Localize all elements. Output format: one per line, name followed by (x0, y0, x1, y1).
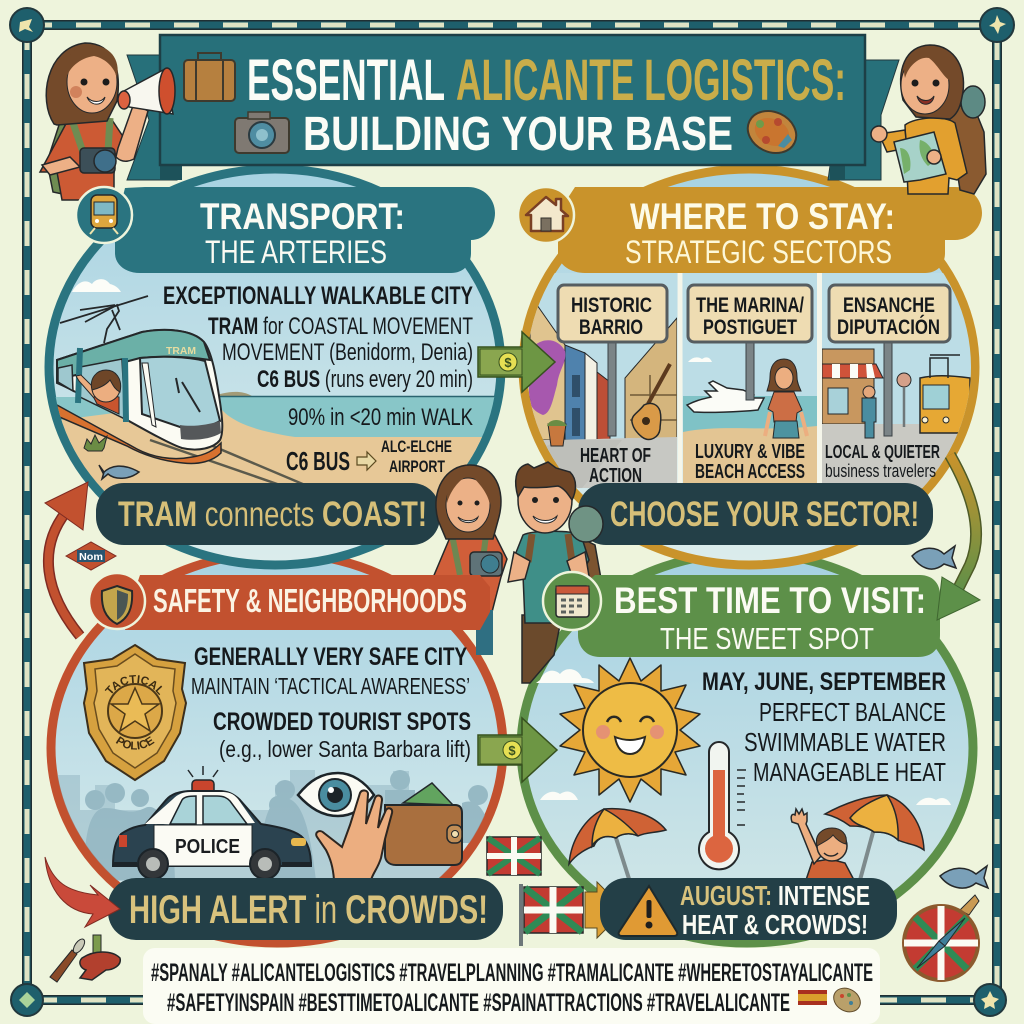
badge: POLICE (116, 736, 154, 750)
signs: ENSANCHE (843, 294, 935, 317)
icon: traveller (862, 398, 876, 438)
icon: train (76, 187, 132, 243)
best time text block: PERFECT BALANCE (759, 697, 946, 727)
airport route label: C6 BUS (286, 446, 350, 476)
arrow: red to high alert (45, 857, 120, 927)
icon: cloud (72, 279, 121, 292)
where to stay heading: WHERE TO STAY: (630, 196, 895, 237)
callout: tram connects coast: TRAM connects COAST! (118, 495, 427, 534)
arrow: money arrow transport to stay (478, 332, 555, 392)
transport heading: TRANSPORT: (200, 196, 405, 237)
icon: map (894, 132, 946, 182)
panel: safety and neighborhoods (46, 558, 507, 948)
title line 1: ESSENTIAL (247, 48, 445, 113)
best time heading: THE SWEET SPOT (660, 621, 874, 656)
icon: metro sign (66, 542, 116, 570)
safety text block: CROWDED TOURIST SPOTS (213, 708, 471, 736)
arrow: money arrow safety to best time (478, 718, 557, 782)
icon: paella (741, 103, 803, 161)
callout: tram connects coast (96, 483, 440, 545)
sector captions: HEART OF (580, 445, 651, 467)
badge (82, 644, 187, 782)
arrow: gold into august callout (585, 882, 625, 938)
signs: HISTORIC (571, 294, 652, 317)
best time text block: SWIMMABLE WATER (744, 727, 946, 757)
airport route label: AIRPORT (389, 457, 445, 476)
icon: fish lower right (940, 866, 988, 888)
best time text block: MANAGEABLE HEAT (753, 757, 946, 787)
sector captions: BEACH ACCESS (695, 461, 805, 483)
sector captions: LUXURY & VIBE (695, 441, 805, 463)
callout: august warning: AUGUST: (680, 880, 772, 911)
icon: palette (829, 983, 865, 1017)
transport heading (115, 187, 495, 273)
transport text block: TRAM for COASTAL MOVEMENT (208, 313, 473, 340)
safety text block (191, 643, 471, 762)
sector captions: business travelers (825, 461, 936, 481)
safety heading (125, 575, 490, 630)
icon: left beach umbrella (569, 809, 666, 882)
callout: high alert in crowds: HIGH ALERT in CROWDS! (129, 888, 488, 932)
clouds (536, 669, 951, 805)
airport route label: ALC-ELCHE (381, 437, 452, 456)
hashtag box (143, 948, 880, 1024)
best time text block (702, 668, 946, 787)
transport text block: EXCEPTIONALLY WALKABLE CITY (163, 282, 473, 310)
safety text block: MAINTAIN ‘TACTICAL AWARENESS’ (191, 673, 470, 699)
callout: choose your sector (578, 483, 933, 545)
sector captions (580, 441, 940, 487)
icon: megaphone (118, 68, 175, 114)
signs: BARRIO (579, 316, 643, 339)
icon: spain flag (798, 990, 827, 1005)
transport text block (163, 282, 473, 431)
arrow: money arrow safety to best time: $ (508, 743, 516, 758)
sector captions: ACTION (589, 465, 642, 487)
signs: POSTIGUET (703, 316, 797, 339)
callout: august warning (600, 878, 897, 940)
panel: transport (40, 169, 510, 565)
icon: fish in transport circle (99, 465, 139, 479)
icon: tools and tapas (50, 935, 120, 982)
best time heading (578, 575, 940, 657)
arrow: money arrow transport to stay: $ (504, 355, 512, 370)
icon: tram with passenger (57, 296, 222, 464)
transport text block: C6 BUS (runs every 20 min) (257, 366, 473, 393)
icon: grass tuft (84, 435, 107, 451)
icon: woman at the marina (765, 359, 807, 438)
beach scene (220, 392, 252, 396)
icon: camera (235, 112, 289, 153)
safety text block: GENERALLY VERY SAFE CITY (194, 643, 467, 671)
where to stay heading (558, 187, 982, 273)
callout: august warning: HEAT & CROWDS! (682, 909, 868, 940)
icon: basque flag with pole (521, 884, 583, 946)
traveller girl with camera (432, 465, 507, 655)
icon: suitcase (184, 53, 235, 101)
arrow: red curve from safety to transport (45, 482, 88, 636)
icon: waving boy with umbrella (791, 795, 924, 880)
icon: fish upper right (912, 546, 956, 569)
panel: where to stay (500, 169, 975, 565)
callout: high alert in crowds (108, 878, 503, 940)
icon: tram with passenger: TRAM (166, 346, 196, 357)
callout: august warning: INTENSE (778, 880, 870, 911)
transport text block: 90% in <20 min WALK (288, 404, 473, 431)
panel: best time to visit (521, 553, 973, 943)
traveller girl with megaphone (40, 43, 175, 200)
icon: shield (89, 573, 145, 629)
icon: compass (904, 895, 979, 980)
column: ensanche diputacion (822, 273, 972, 488)
sector captions: LOCAL & QUIETER (825, 442, 940, 462)
badge: TACTICAL (104, 675, 162, 696)
transport text block: MOVEMENT (Benidorm, Denia) (222, 339, 473, 366)
traveller boy with backpack (508, 462, 603, 683)
best time text block: MAY, JUNE, SEPTEMBER (702, 668, 946, 696)
safety text block: (e.g., lower Santa Barbara lift) (219, 736, 471, 762)
icon: house (518, 187, 574, 243)
transport heading: THE ARTERIES (205, 234, 387, 270)
icon: calendar (543, 572, 601, 630)
icon: police car (113, 766, 312, 879)
best time heading: BEST TIME TO VISIT: (614, 580, 926, 621)
icon: sun (560, 658, 700, 802)
signs: THE MARINA/ (696, 294, 804, 317)
title banner (127, 35, 899, 180)
traveller girl with map (871, 45, 986, 194)
airport route label (286, 437, 452, 476)
icon: small basque flag (487, 837, 541, 875)
arrow: green curve from stay to best time (937, 455, 980, 620)
icon: thermometer (699, 742, 746, 869)
signs (558, 285, 950, 436)
safety heading: SAFETY & NEIGHBORHOODS (153, 582, 467, 619)
icon: police car: POLICE (175, 836, 240, 858)
icon: city tram (920, 376, 970, 433)
column: the marina and postiguet (683, 273, 817, 483)
crowd silhouette (55, 770, 492, 881)
where to stay heading: STRATEGIC SECTORS (625, 234, 892, 270)
icon: metro sign: Nom (79, 552, 103, 563)
column: historic barrio (528, 273, 677, 488)
icon: guitar (632, 364, 670, 439)
icon: hand, eye and wallet (298, 773, 462, 880)
signs: DIPUTACIÓN (837, 315, 940, 339)
title line 2: BUILDING YOUR BASE (303, 108, 733, 161)
icon: yacht (687, 381, 764, 412)
